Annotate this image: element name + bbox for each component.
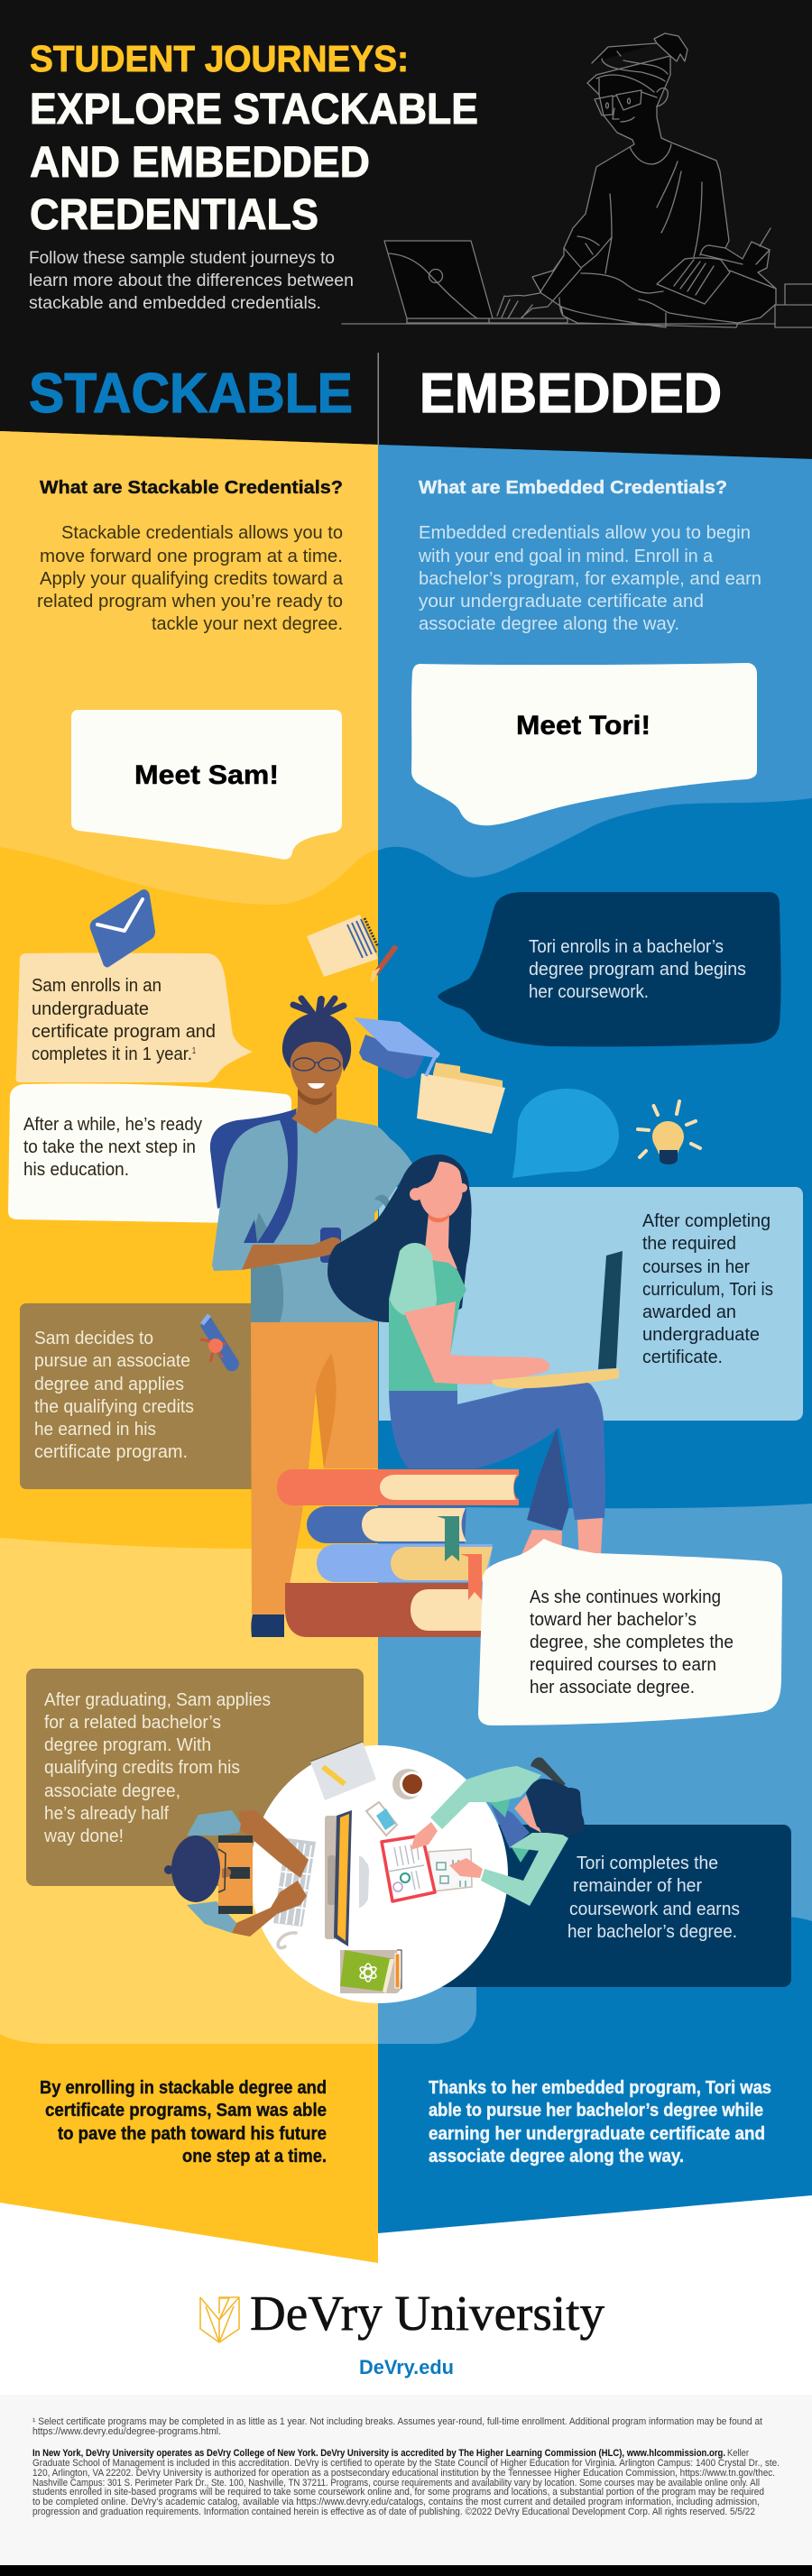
callout: after graduating: associate degree,	[44, 1781, 180, 1801]
title: EXPLORE STACKABLE	[30, 86, 478, 133]
callout: sam decides: degree and applies	[34, 1375, 184, 1394]
callout: sam enrolls	[15, 953, 253, 1082]
text block: stackable conclusion: one step at a time.	[182, 2147, 327, 2167]
text block: what are stackable credentials: Apply your qualifying credits toward a	[40, 569, 344, 589]
icon: envelope	[90, 889, 155, 967]
callout: tori enrolls: degree program and begins	[529, 960, 746, 980]
callout: continuing toward associate: required courses to earn	[530, 1655, 716, 1675]
callout: after graduating: After graduating, Sam applies	[44, 1690, 271, 1710]
callout: meet tori: Meet Tori!	[516, 711, 651, 741]
callout: tori certificate: the required	[642, 1234, 736, 1254]
text: tori completes: her bachelor’s degree.	[567, 1922, 737, 1942]
text: tori completes: coursework and earns	[569, 1900, 740, 1919]
callout: sam enrolls: undergraduate	[32, 999, 149, 1019]
heading: embedded: EMBEDDED	[420, 363, 722, 425]
text block: what are stackable credentials: related program when you’re ready to	[37, 592, 343, 612]
illustration: Tori from above	[411, 1757, 585, 1906]
text: tori completes: Tori completes the	[577, 1854, 718, 1873]
illustration: Sam from above	[164, 1810, 309, 1937]
callout: after graduating: degree program. With	[44, 1735, 211, 1755]
callout: meet sam: Meet Sam!	[134, 760, 279, 790]
callout: after graduating: he’s already half	[44, 1804, 169, 1824]
line art: student with laptop	[342, 33, 812, 327]
icon: graduation cap	[354, 1017, 440, 1079]
callout: sam decides: certificate program.	[34, 1442, 188, 1462]
text: tori completes: remainder of her	[573, 1876, 702, 1896]
callout: sam enrolls: 1	[192, 1046, 196, 1056]
callout: after a while	[8, 1083, 291, 1224]
title	[30, 38, 478, 239]
header background	[0, 0, 812, 465]
callout: tori certificate: certificate.	[642, 1348, 723, 1367]
text: tori completes	[567, 1854, 740, 1942]
text block: what are embedded credentials: associate degree along the way.	[419, 614, 679, 634]
logo: DeVry University: DeVry University	[250, 2286, 604, 2341]
footer: disclaimers: to be completed online. DeVry’s academic catalog, available via https://www.devry.edu/catalogs, contains the most current and detailed program information, including admission,	[32, 2497, 760, 2507]
footer: disclaimers: https://www.devry.edu/degree-programs.html.	[32, 2426, 221, 2437]
illustration: shared desk	[250, 1742, 508, 2003]
icon: folder	[417, 1063, 505, 1134]
text block: what are stackable credentials: tackle your next degree.	[152, 614, 343, 634]
callout: sam enrolls: Sam enrolls in an	[32, 976, 161, 996]
text block: what are embedded credentials: What are Embedded Credentials?	[419, 478, 727, 498]
icon: notebook and pencil	[307, 915, 396, 981]
callout: after a while: After a while, he’s ready	[23, 1115, 202, 1135]
footer: disclaimers: ¹ Select certificate programs may be completed in as little as 1 year. Not including breaks. Assumes year-round, full-time enrollment. Additional program information may be found at	[32, 2416, 762, 2427]
icon: light bulb	[638, 1101, 700, 1164]
footer: black strip	[0, 2565, 812, 2576]
text block: what are stackable credentials	[37, 478, 344, 634]
callout: continuing toward associate: toward her bachelor’s	[530, 1610, 697, 1630]
text block: embedded conclusion: associate degree along the way.	[429, 2147, 684, 2167]
illustration: Tori sitting	[328, 1155, 623, 1574]
icon: diploma	[200, 1315, 239, 1371]
callout: after a while: his education.	[23, 1160, 129, 1180]
callout: after a while: to take the next step in	[23, 1137, 196, 1157]
callout: tori certificate: curriculum, Tori is	[642, 1280, 773, 1300]
callout: after graduating	[26, 1669, 364, 1886]
panel: stackable background	[0, 431, 378, 2263]
title: CREDENTIALS	[30, 191, 318, 239]
icon: speech bubble	[512, 1089, 619, 1178]
text block: what are embedded credentials: bachelor’s program, for example, and earn	[419, 569, 761, 589]
callout: sam decides: Sam decides to	[34, 1329, 153, 1348]
callout: continuing toward associate: her associate degree.	[530, 1678, 695, 1697]
callout: sam enrolls: certificate program and	[32, 1022, 216, 1042]
callout: tori certificate: undergraduate	[642, 1325, 760, 1345]
callout: after graduating: way done!	[43, 1826, 124, 1846]
text block: what are stackable credentials: Stackable credentials allows you to	[61, 523, 343, 543]
footer: disclaimers: In New York, DeVry University operates as DeVry College of New York. DeVry University is accredited by The Higher Learning Commission (HLC), www.hlcommission.org.	[32, 2448, 725, 2459]
text block: stackable conclusion	[40, 2078, 327, 2167]
link: DeVry.edu: DeVry.edu	[359, 2356, 454, 2378]
text block: stackable conclusion: certificate programs, Sam was able	[45, 2101, 327, 2121]
callout: tori enrolls	[438, 892, 781, 1046]
illustration: book stack	[277, 1469, 519, 1637]
callout: continuing toward associate	[478, 1539, 782, 1725]
callout: tori enrolls: Tori enrolls in a bachelor’s	[529, 937, 724, 957]
title: STUDENT JOURNEYS:	[30, 38, 409, 79]
intro text: Follow these sample student journeys to	[29, 249, 335, 268]
callout: sam decides: pursue an associate	[34, 1351, 190, 1371]
callout: tori certificate	[379, 1187, 803, 1421]
callout: tori completes	[361, 1825, 791, 1987]
text block: stackable conclusion: By enrolling in stackable degree and	[40, 2078, 327, 2098]
text block: what are stackable credentials: move forward one program at a time.	[40, 547, 343, 566]
text block: what are embedded credentials: with your end goal in mind. Enroll in a	[418, 547, 714, 566]
callout: tori enrolls: her coursework.	[529, 982, 649, 1002]
callout: sam decides: the qualifying credits	[34, 1397, 194, 1417]
footer: disclaimers	[0, 2395, 812, 2565]
callout: sam decides	[20, 1303, 263, 1489]
callout: after graduating: qualifying credits from his	[44, 1758, 240, 1778]
footer: disclaimers: students enrolled in site-based programs will be required to take some coursework online and, for some programs and locations, a substantial portion of the program may be required	[32, 2487, 764, 2498]
callout: tori certificate: courses in her	[642, 1257, 750, 1277]
heading: stackable: STACKABLE	[29, 363, 353, 425]
illustration: Sam standing	[210, 998, 412, 1637]
callout: tori certificate: awarded an	[642, 1302, 736, 1322]
text block: embedded conclusion: Thanks to her embedded program, Tori was	[429, 2078, 771, 2098]
intro text: learn more about the differences between	[29, 271, 354, 290]
text block: stackable conclusion: to pave the path toward his future	[58, 2124, 327, 2144]
footer: disclaimers: progression and graduation requirements. Information contained herein is effective as of date of publishing. ©2022 DeVry Educational Development Corp. All rights reserved. 5/5/22	[32, 2507, 755, 2517]
footer: disclaimers: Keller	[727, 2448, 749, 2459]
callout: tori certificate: After completing	[642, 1211, 770, 1231]
callout: continuing toward associate: As she continues working	[530, 1587, 721, 1607]
text block: embedded conclusion: able to pursue her bachelor’s degree while	[429, 2101, 763, 2121]
text block: what are embedded credentials: your undergraduate certificate and	[419, 592, 704, 612]
footer: disclaimers: Nashville Campus: 301 S. Perimeter Park Dr., Ste. 100, Nashville, TN 37211. Programs, course requirements and availability vary by location. Some courses may be available online only. All	[32, 2478, 760, 2489]
callout: sam enrolls: completes it in 1 year.	[32, 1044, 192, 1064]
callout: meet tori	[411, 663, 757, 825]
footer: disclaimers: 120, Arlington, VA 22202. DeVry University is authorized for operation as a postsecondary educational institution by the Tennessee Higher Education Commission, https://www.tn.gov/thec.	[32, 2468, 775, 2479]
footer: disclaimers: Graduate School of Management is included in this accreditation. DeVry is certified to operate by the State Council of Higher Education for Virginia. Arlington Campus: 1400 Crystal Dr., ste.	[32, 2458, 780, 2469]
text block: embedded conclusion	[429, 2078, 771, 2167]
callout: meet sam	[71, 710, 342, 860]
callout: sam decides: he earned in his	[34, 1420, 156, 1440]
text block: what are embedded credentials	[418, 478, 761, 634]
title: AND EMBEDDED	[30, 139, 370, 187]
callout: after graduating: for a related bachelor’s	[44, 1713, 221, 1733]
text block: embedded conclusion: earning her undergraduate certificate and	[429, 2124, 765, 2144]
callout: continuing toward associate: degree, she completes the	[530, 1633, 734, 1652]
intro text: stackable and embedded credentials.	[29, 294, 321, 313]
panel: embedded background	[378, 445, 812, 2233]
intro text	[29, 249, 354, 313]
text block: what are embedded credentials: Embedded credentials allow you to begin	[419, 523, 751, 543]
text block: what are stackable credentials: What are Stackable Credentials?	[40, 478, 343, 498]
